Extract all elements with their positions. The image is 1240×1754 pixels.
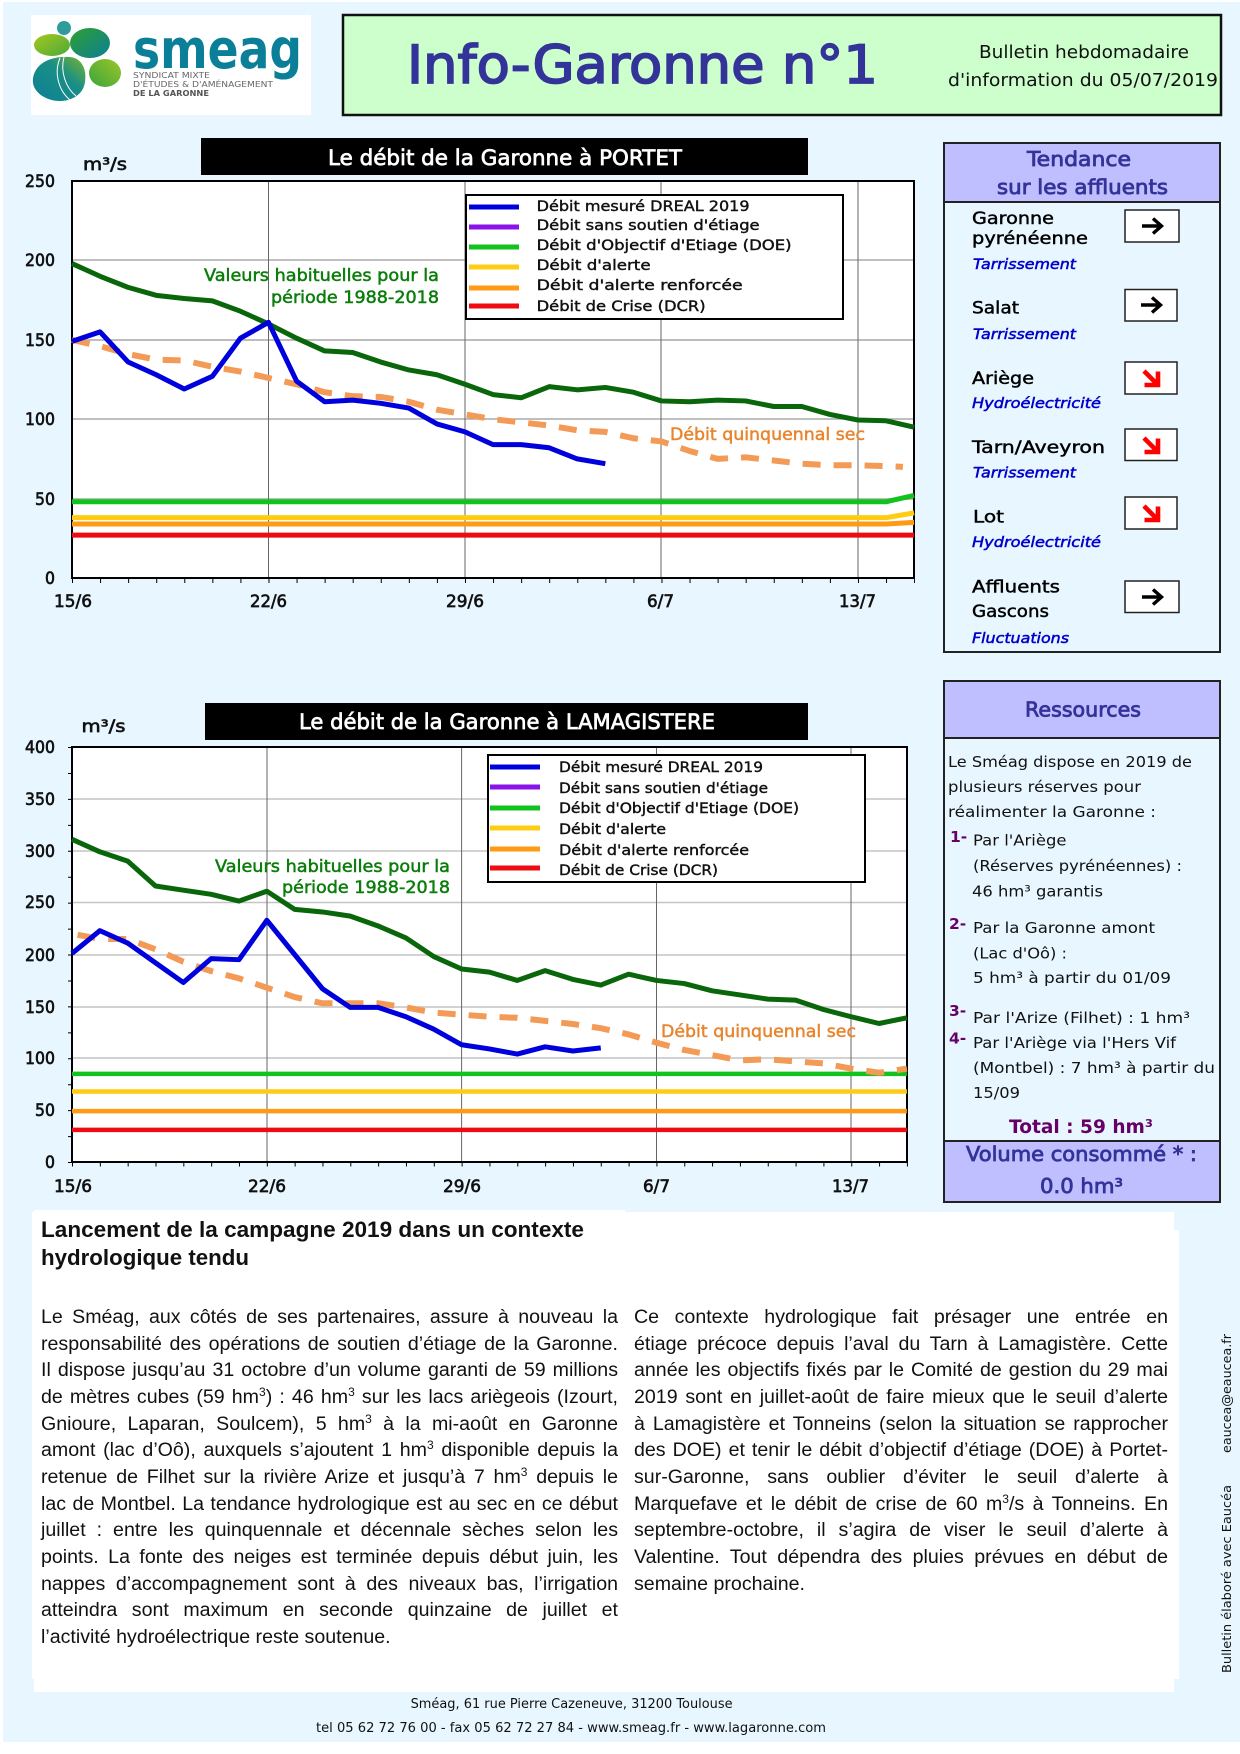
volume consommé	[944, 1141, 1220, 1201]
row: Garonne pyrénéenne: Tarrissement	[973, 257, 1077, 273]
x axis labels	[54, 1177, 869, 1197]
legend: Débit d'alerte	[559, 822, 666, 838]
x axis labels: 13/7	[839, 592, 876, 612]
intro text: réalimenter la Garonne :	[948, 803, 1156, 821]
y axis labels: 150	[25, 998, 55, 1018]
legend: Débit sans soutien d'étiage	[559, 781, 768, 797]
intro text	[948, 753, 1192, 821]
y axis labels	[25, 738, 55, 1173]
row: Ariège	[972, 362, 1177, 412]
panel: tendance sur les affluents	[944, 143, 1220, 652]
y axis labels: 350	[25, 790, 55, 810]
logo: Sméag: D'ÉTUDES & D'AMÉNAGEMENT	[133, 78, 273, 89]
vertical credits: Bulletin élaboré avec Eaucéa	[1220, 1485, 1234, 1673]
y axis labels: 50	[35, 490, 55, 510]
annotation: débit quinquennal sec: Débit quinquennal sec	[661, 1022, 856, 1042]
legend: Débit d'alerte	[537, 258, 651, 274]
row: Tarn/Aveyron: Tarrissement	[973, 466, 1077, 482]
legend	[488, 755, 865, 882]
article background	[32, 1210, 1179, 1692]
left column: points. La fonte des neiges est terminée depuis début juin, les	[41, 1546, 618, 1568]
plot area	[72, 747, 907, 1162]
row: Lot	[972, 497, 1177, 551]
footer address: tel 05 62 72 76 00 - fax 05 62 72 27 84 - www.smeag.fr - www.lagaronne.com	[316, 1721, 826, 1736]
left column: Gnioure, Laparan, Soulcem), 5 hm3 à la mi-août en Garonne	[41, 1412, 618, 1435]
left column: l’activité hydroélectrique reste soutenue.	[41, 1626, 391, 1648]
left column: de mètres cubes (59 hm3) : 46 hm3 sur les lacs ariègeois (Izourt,	[41, 1385, 618, 1408]
annotation: valeurs habituelles: Valeurs habituelles pour la	[215, 857, 450, 877]
row: Ariège: Ariège	[972, 369, 1034, 389]
row: Affluents Gascons: Fluctuations	[972, 631, 1069, 647]
unit label: m³/s	[82, 717, 126, 737]
legend: Débit mesuré DREAL 2019	[559, 760, 763, 776]
annotation: valeurs habituelles: période 1988-2018	[271, 288, 439, 308]
right column: Valentine. Tout dépendra des pluies prévues en début de	[634, 1546, 1168, 1568]
vertical credits	[1220, 1334, 1234, 1673]
resource 2: 2-	[949, 915, 966, 933]
y axis labels: 0	[45, 569, 55, 589]
resource 1: Par l'Ariège	[973, 832, 1066, 850]
y axis labels: 150	[25, 331, 55, 351]
row: Salat: Tarrissement	[973, 327, 1077, 343]
annotation: valeurs habituelles	[204, 266, 439, 308]
legend: Débit de Crise (DCR)	[559, 863, 718, 879]
resource 4: Par l'Ariège via l'Hers Vif	[973, 1034, 1177, 1052]
title banner: Bulletin hebdomadaire	[979, 42, 1189, 63]
left column: responsabilité des opérations de soutien d’étiage de la Garonne.	[41, 1333, 618, 1355]
footer address: Sméag, 61 rue Pierre Cazeneuve, 31200 Toulouse	[411, 1697, 733, 1712]
resource 4: (Montbel) : 7 hm³ à partir du	[973, 1059, 1215, 1077]
legend: Débit de Crise (DCR)	[537, 299, 706, 315]
left column: lac de Montbel. La tendance hydrologique est au sec en ce début	[41, 1493, 618, 1515]
x axis labels: 13/7	[832, 1177, 869, 1197]
volume consommé: 0.0 hm³	[1040, 1174, 1123, 1198]
legend: Débit d'alerte renforcée	[537, 278, 743, 294]
right column: semaine prochaine.	[634, 1572, 805, 1594]
left column: atteindra sont maximum en seconde quinzaine de juillet et	[41, 1599, 618, 1621]
chart: débit de la Garonne à Portet	[25, 138, 915, 612]
right column: Marquefave et le débit de crise de 60 m3/s à Tonneins. En	[634, 1492, 1168, 1515]
article heading: hydrologique tendu	[41, 1245, 249, 1270]
left column: nappes d’accompagnement sont à des niveaux bas, l’irrigation	[41, 1572, 618, 1594]
x axis labels: 22/6	[250, 592, 287, 612]
resource 1: 1-	[950, 828, 967, 846]
legend: Débit d'Objectif d'Etiage (DOE)	[559, 801, 799, 817]
x axis labels: 6/7	[647, 592, 674, 612]
row: Affluents Gascons: Gascons	[972, 602, 1049, 622]
row: Affluents Gascons	[972, 578, 1179, 647]
x axis labels: 29/6	[443, 1177, 481, 1197]
left column: amont (lac d’Oô), auxquels s’ajoutent 1 hm3 disponible depuis la	[41, 1438, 618, 1461]
y axis labels: 100	[25, 1049, 55, 1069]
intro text: plusieurs réserves pour	[948, 778, 1142, 796]
chart title: Lamagistère: Le débit de la Garonne à LAMAGISTERE	[299, 710, 715, 734]
y axis labels	[25, 172, 55, 589]
article heading	[41, 1217, 584, 1270]
annotation: débit quinquennal sec: Débit quinquennal sec	[670, 425, 865, 445]
right column: Ce contexte hydrologique fait présager une entrée en	[634, 1306, 1168, 1328]
left column: retenue de Filhet sur la rivière Arize et jusqu’à 7 hm3 depuis le	[41, 1465, 618, 1488]
x axis labels: 6/7	[643, 1177, 670, 1197]
row: Lot: Hydroélectricité	[972, 535, 1101, 551]
chart title: Lamagistère	[205, 703, 808, 740]
x axis labels: 29/6	[446, 592, 484, 612]
resource 2	[949, 915, 1171, 987]
total: Total : 59 hm³	[1009, 1116, 1153, 1138]
logo: Sméag	[31, 15, 311, 115]
annotation: valeurs habituelles: Valeurs habituelles pour la	[204, 266, 439, 286]
left column	[40, 1306, 618, 1648]
panel header: tendance: Tendance	[1026, 147, 1131, 171]
resource 3: Par l'Arize (Filhet) : 1 hm³	[973, 1009, 1190, 1027]
data series	[72, 839, 907, 1130]
panel header: ressources	[944, 682, 1220, 738]
resource 2: (Lac d'Oô) :	[973, 945, 1067, 963]
panel header: tendance	[944, 144, 1220, 202]
resource 4	[949, 1030, 1215, 1102]
y axis labels: 200	[25, 251, 55, 271]
resource 1: (Réserves pyrénéennes) :	[973, 857, 1182, 875]
annotation: valeurs habituelles	[215, 857, 450, 898]
title banner: d'information du 05/07/2019	[948, 70, 1218, 91]
resource 3: 3-	[949, 1002, 966, 1020]
row: Garonne pyrénéenne	[972, 209, 1179, 273]
right column: 2019 sont en juillet-août de faire mieux que le seuil d’alerte	[634, 1386, 1168, 1408]
footer address	[316, 1697, 826, 1736]
legend: Débit d'Objectif d'Etiage (DOE)	[537, 238, 792, 254]
left column: Le Sméag, aux côtés de ses partenaires, assure à nouveau la	[41, 1306, 618, 1328]
title banner	[343, 15, 1221, 115]
unit label: m³/s	[83, 155, 127, 175]
right column: à Lamagistère et Tonneins (selon la situation se rapprocher	[634, 1413, 1168, 1435]
row: Tarn/Aveyron	[971, 429, 1177, 482]
y axis labels: 100	[25, 410, 55, 430]
resource 3	[949, 1002, 1190, 1027]
legend	[466, 195, 843, 319]
legend: Débit mesuré DREAL 2019	[537, 199, 750, 215]
x axis labels: 22/6	[248, 1177, 286, 1197]
legend: Débit d'alerte renforcée	[559, 843, 749, 859]
y axis labels: 50	[35, 1101, 55, 1121]
panel header: ressources: Ressources	[1025, 698, 1141, 722]
logo: Sméag: DE LA GARONNE	[133, 89, 209, 98]
legend: Débit sans soutien d'étiage	[537, 218, 760, 234]
annotation: valeurs habituelles: période 1988-2018	[282, 878, 450, 898]
x axis labels	[54, 592, 876, 612]
row: Tarn/Aveyron: Tarn/Aveyron	[971, 438, 1105, 458]
intro text: Le Sméag dispose en 2019 de	[948, 753, 1192, 771]
right column: des DOE) et tenir le débit d’objectif d’étiage (DOE) à Portet-	[634, 1439, 1168, 1461]
y axis labels: 0	[45, 1153, 55, 1173]
resource 1: 46 hm³ garantis	[972, 883, 1103, 901]
resource 4: 4-	[949, 1030, 966, 1048]
plot area	[72, 181, 914, 578]
right column	[634, 1306, 1168, 1594]
logo: Sméag: SYNDICAT MIXTE	[133, 71, 210, 80]
article heading: Lancement de la campagne 2019 dans un contexte	[41, 1217, 584, 1242]
y axis labels: 200	[25, 946, 55, 966]
row: Garonne pyrénéenne: pyrénéenne	[972, 229, 1088, 249]
panel header: tendance: sur les affluents	[997, 175, 1168, 199]
volume consommé: Volume consommé * :	[966, 1142, 1197, 1166]
right column: sur-Garonne, sans oublier d’éviter le seuil d’alerte à	[634, 1466, 1168, 1488]
y axis labels: 250	[25, 172, 55, 192]
logo: Sméag: smeag	[133, 18, 302, 81]
x axis labels: 15/6	[54, 592, 92, 612]
row: Lot: Lot	[973, 508, 1004, 528]
resource 2: Par la Garonne amont	[973, 919, 1155, 937]
row: Garonne pyrénéenne: Garonne	[972, 209, 1054, 229]
left column: juillet : entre les quinquennale et décennale sèches selon les	[41, 1519, 618, 1541]
chart: débit de la Garonne à Lamagistère	[25, 703, 908, 1197]
row: Salat	[972, 290, 1177, 343]
right column: étiage précoce depuis l’aval du Tarn à Lamagistère. Cette	[634, 1333, 1168, 1355]
resource 4: 15/09	[973, 1084, 1020, 1102]
y axis labels: 400	[25, 738, 55, 758]
left column: Il dispose jusqu’au 31 octobre d’un volume garanti de 59 millions	[41, 1359, 618, 1381]
chart title: Portet: Le débit de la Garonne à PORTET	[328, 146, 682, 170]
row: Affluents Gascons: Affluents	[972, 578, 1060, 598]
y axis labels: 300	[25, 842, 55, 862]
chart title: Portet	[201, 138, 808, 175]
resource 2: 5 hm³ à partir du 01/09	[973, 969, 1171, 987]
title banner: Info-Garonne n°1	[407, 35, 878, 96]
resource 1	[950, 828, 1182, 901]
row: Ariège: Hydroélectricité	[972, 396, 1101, 412]
data series	[72, 264, 914, 535]
right column: année les objectifs fixés par le Comité de gestion du 29 mai	[634, 1359, 1168, 1381]
row: Salat: Salat	[972, 298, 1019, 318]
y axis labels: 250	[25, 893, 55, 913]
right column: septembre-octobre, il s’agira de viser le seuil d’alerte à	[634, 1519, 1168, 1541]
panel: ressources	[944, 681, 1220, 1202]
x axis labels: 15/6	[54, 1177, 92, 1197]
vertical credits: eaucea@eaucea.fr	[1220, 1334, 1234, 1453]
